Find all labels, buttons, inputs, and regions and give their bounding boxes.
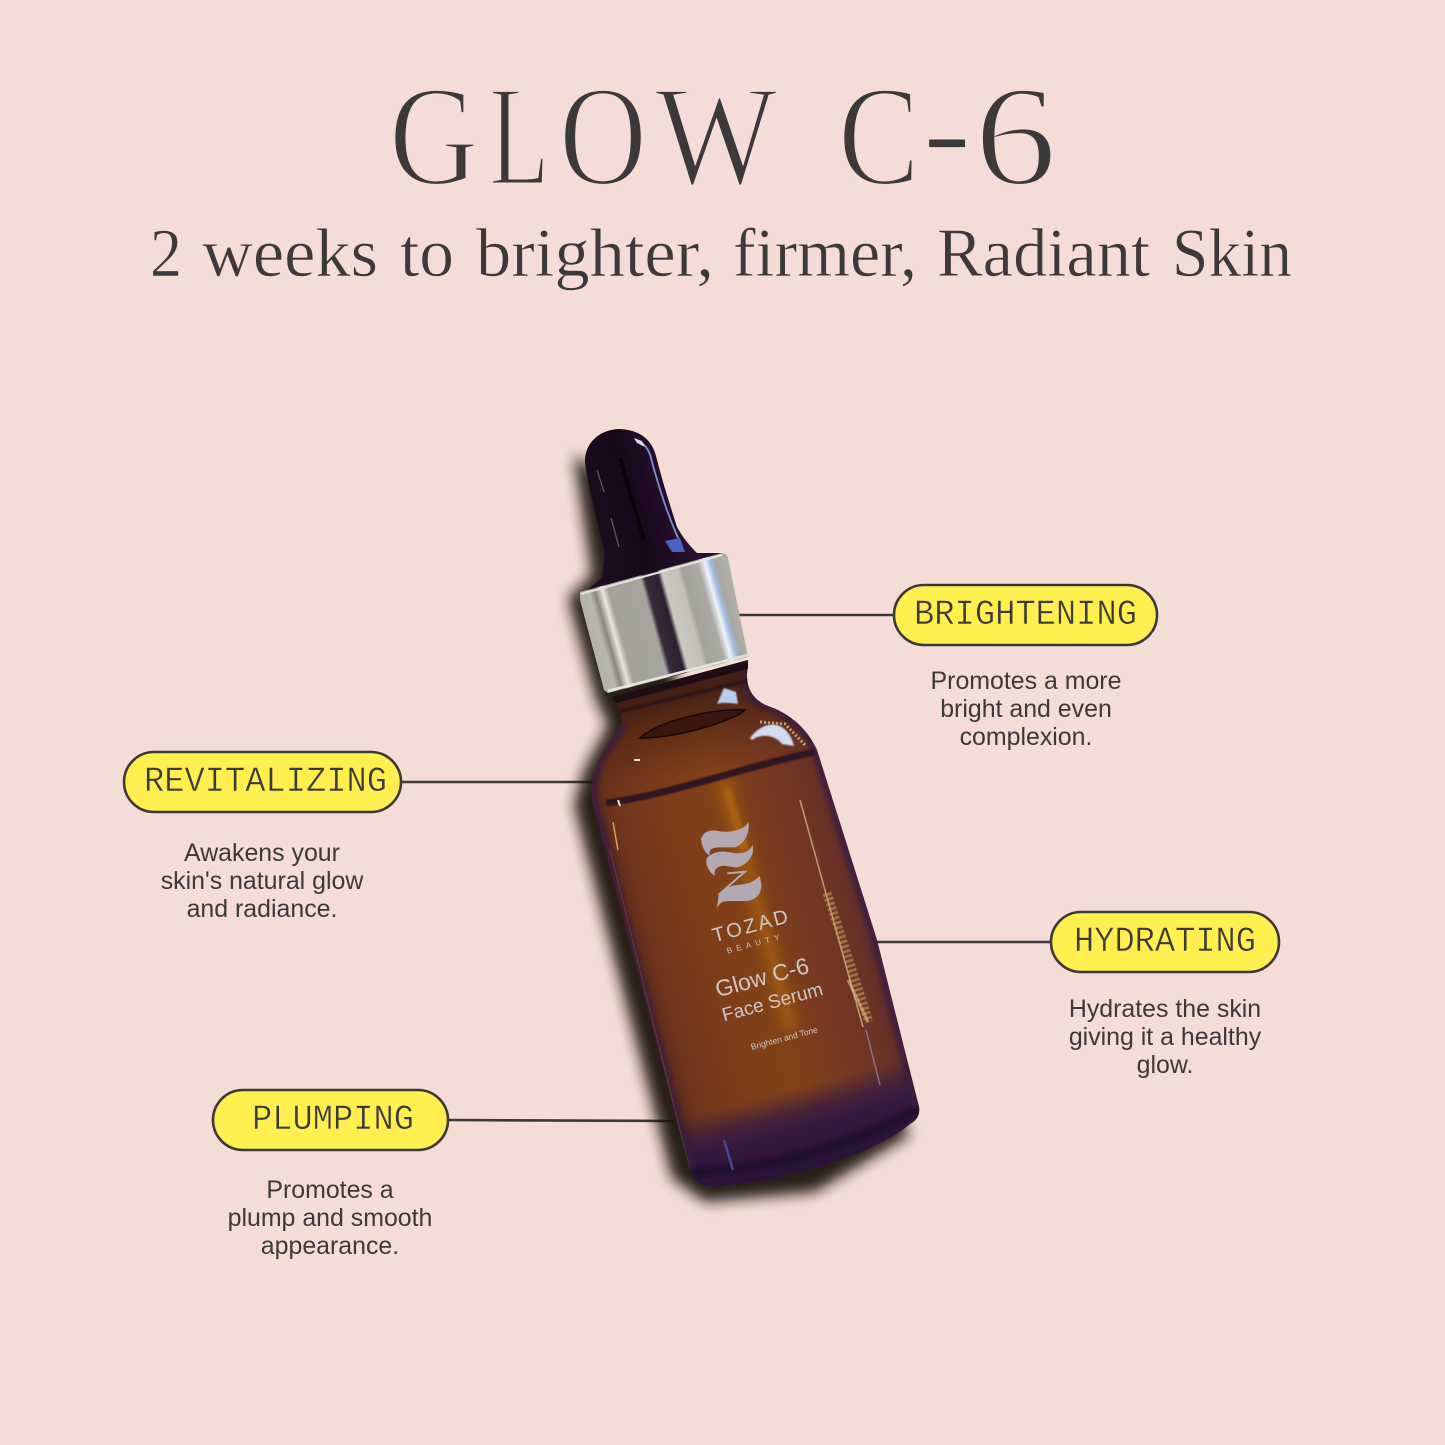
title: - [922, 50, 972, 208]
callout: revitalizing [124, 752, 401, 923]
title: C [838, 57, 920, 215]
description: hydrating: giving it a healthy [1069, 1023, 1262, 1051]
pill: plumping [213, 1090, 448, 1150]
description: revitalizing: and radiance. [187, 895, 337, 923]
label text: Face Serum [720, 979, 825, 1026]
bottle shadow [568, 455, 910, 1202]
description: brightening: Promotes a more [931, 667, 1121, 695]
pill: plumping: PLUMPING [252, 1100, 414, 1140]
label text: Glow C-6 [712, 952, 812, 1002]
callout: hydrating [1051, 912, 1279, 1079]
title: L [489, 57, 550, 215]
pill: revitalizing: REVITALIZING [144, 762, 387, 802]
subtitle: weeks [202, 215, 378, 291]
callout: plumping [213, 1090, 448, 1260]
label logo [701, 822, 761, 910]
description: hydrating: Hydrates the skin [1069, 995, 1261, 1023]
pill: hydrating [1051, 912, 1279, 972]
pill: revitalizing [124, 752, 401, 812]
title: 6 [974, 57, 1057, 215]
label text [710, 905, 825, 1052]
subtitle: 2 [150, 215, 182, 291]
label text: TOZAD [710, 905, 793, 947]
title: O [559, 57, 647, 215]
subtitle: firmer, [733, 215, 917, 291]
description: plumping: appearance. [261, 1232, 399, 1260]
connector lines [399, 615, 1052, 1121]
pill: brightening [894, 585, 1157, 645]
title: W [655, 57, 777, 215]
subtitle: brighter, [476, 215, 714, 291]
pill: hydrating: HYDRATING [1074, 922, 1256, 962]
description: revitalizing: Awakens your [184, 839, 340, 867]
label text: Brighten and Tone [750, 1024, 819, 1052]
product bottle [560, 429, 940, 1202]
subtitle: Radiant [937, 215, 1150, 291]
description: plumping: plump and smooth [228, 1204, 432, 1232]
description: hydrating: glow. [1137, 1051, 1193, 1079]
description: plumping: Promotes a [266, 1176, 394, 1204]
amber glass body [592, 660, 920, 1187]
pill: brightening: BRIGHTENING [914, 595, 1137, 635]
subtitle: Skin [1172, 215, 1292, 291]
callout: brightening [894, 585, 1157, 751]
dropper bulb [580, 429, 722, 596]
subtitle: to [400, 215, 454, 291]
description: brightening: bright and even [940, 695, 1112, 723]
title: G [389, 57, 479, 215]
metal collar [580, 553, 748, 693]
label text: BEAUTY [726, 932, 785, 956]
description: brightening: complexion. [960, 723, 1092, 751]
description: revitalizing: skin's natural glow [161, 867, 364, 895]
